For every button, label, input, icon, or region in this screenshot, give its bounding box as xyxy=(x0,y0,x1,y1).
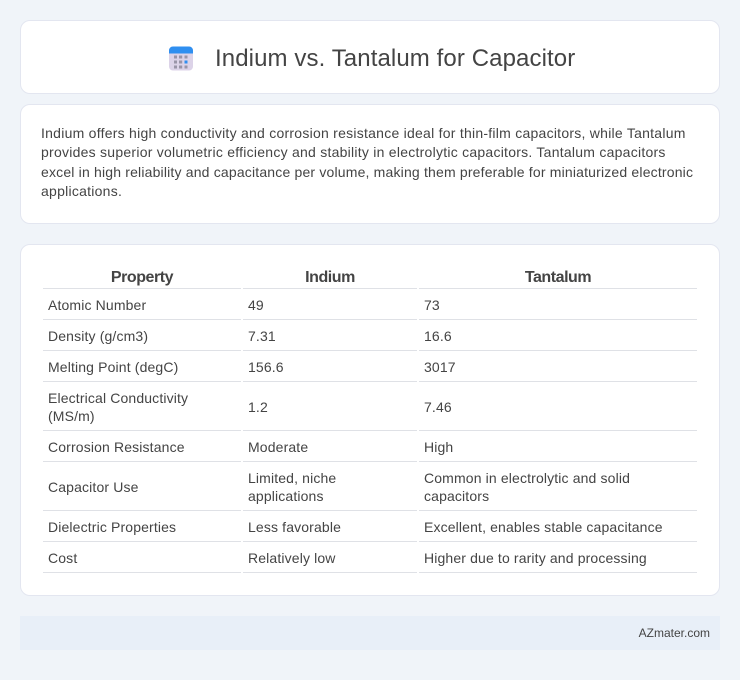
comparison table: 7.46 xyxy=(424,399,452,415)
comparison table: Corrosion Resistance xyxy=(48,439,185,455)
comparison table: applications xyxy=(248,488,324,504)
comparison table: 3017 xyxy=(424,359,456,375)
comparison table: Density (g/cm3) xyxy=(48,328,148,344)
comparison table: Dielectric Properties xyxy=(48,519,176,535)
icon: calendar xyxy=(169,46,193,70)
summary text: excel in high reliability and capacitance per volume, making them preferable for miniaturized electronic xyxy=(41,164,693,180)
comparison table: (MS/m) xyxy=(48,408,95,424)
comparison table: capacitors xyxy=(424,488,489,504)
comparison table: Property xyxy=(111,269,173,286)
title: Indium vs. Tantalum for Capacitor xyxy=(215,45,575,72)
comparison table: Moderate xyxy=(248,439,308,455)
comparison table: 73 xyxy=(424,297,440,313)
comparison table: Excellent, enables stable capacitance xyxy=(424,519,663,535)
comparison table: Tantalum xyxy=(525,269,591,286)
comparison table: Indium xyxy=(305,269,355,286)
comparison table: 49 xyxy=(248,297,264,313)
panel: summary xyxy=(20,104,720,224)
comparison table: Limited, niche xyxy=(248,470,336,486)
comparison table: 1.2 xyxy=(248,399,268,415)
comparison table: High xyxy=(424,439,453,455)
comparison table: Capacitor Use xyxy=(48,479,139,495)
comparison table: Electrical Conductivity xyxy=(48,390,188,406)
panel: title card xyxy=(20,20,720,94)
comparison table: Relatively low xyxy=(248,550,336,566)
comparison table: Common in electrolytic and solid xyxy=(424,470,630,486)
footer xyxy=(20,616,720,650)
summary text: Indium offers high conductivity and corrosion resistance ideal for thin-film capacitors, while Tantalum xyxy=(41,125,686,141)
summary text: provides superior volumetric efficiency and stability in electrolytic capacitors. Tantalum capacitors xyxy=(41,144,666,160)
comparison table: 7.31 xyxy=(248,328,276,344)
summary text: applications. xyxy=(41,183,122,199)
comparison table: Less favorable xyxy=(248,519,341,535)
comparison table: Cost xyxy=(48,550,77,566)
comparison table: Atomic Number xyxy=(48,297,146,313)
summary text xyxy=(41,125,693,199)
comparison table: 16.6 xyxy=(424,328,452,344)
panel: comparison table xyxy=(20,244,720,596)
comparison table: Melting Point (degC) xyxy=(48,359,178,375)
comparison table: Higher due to rarity and processing xyxy=(424,550,647,566)
comparison table: 156.6 xyxy=(248,359,284,375)
footer credit: AZmater.com xyxy=(639,626,710,640)
